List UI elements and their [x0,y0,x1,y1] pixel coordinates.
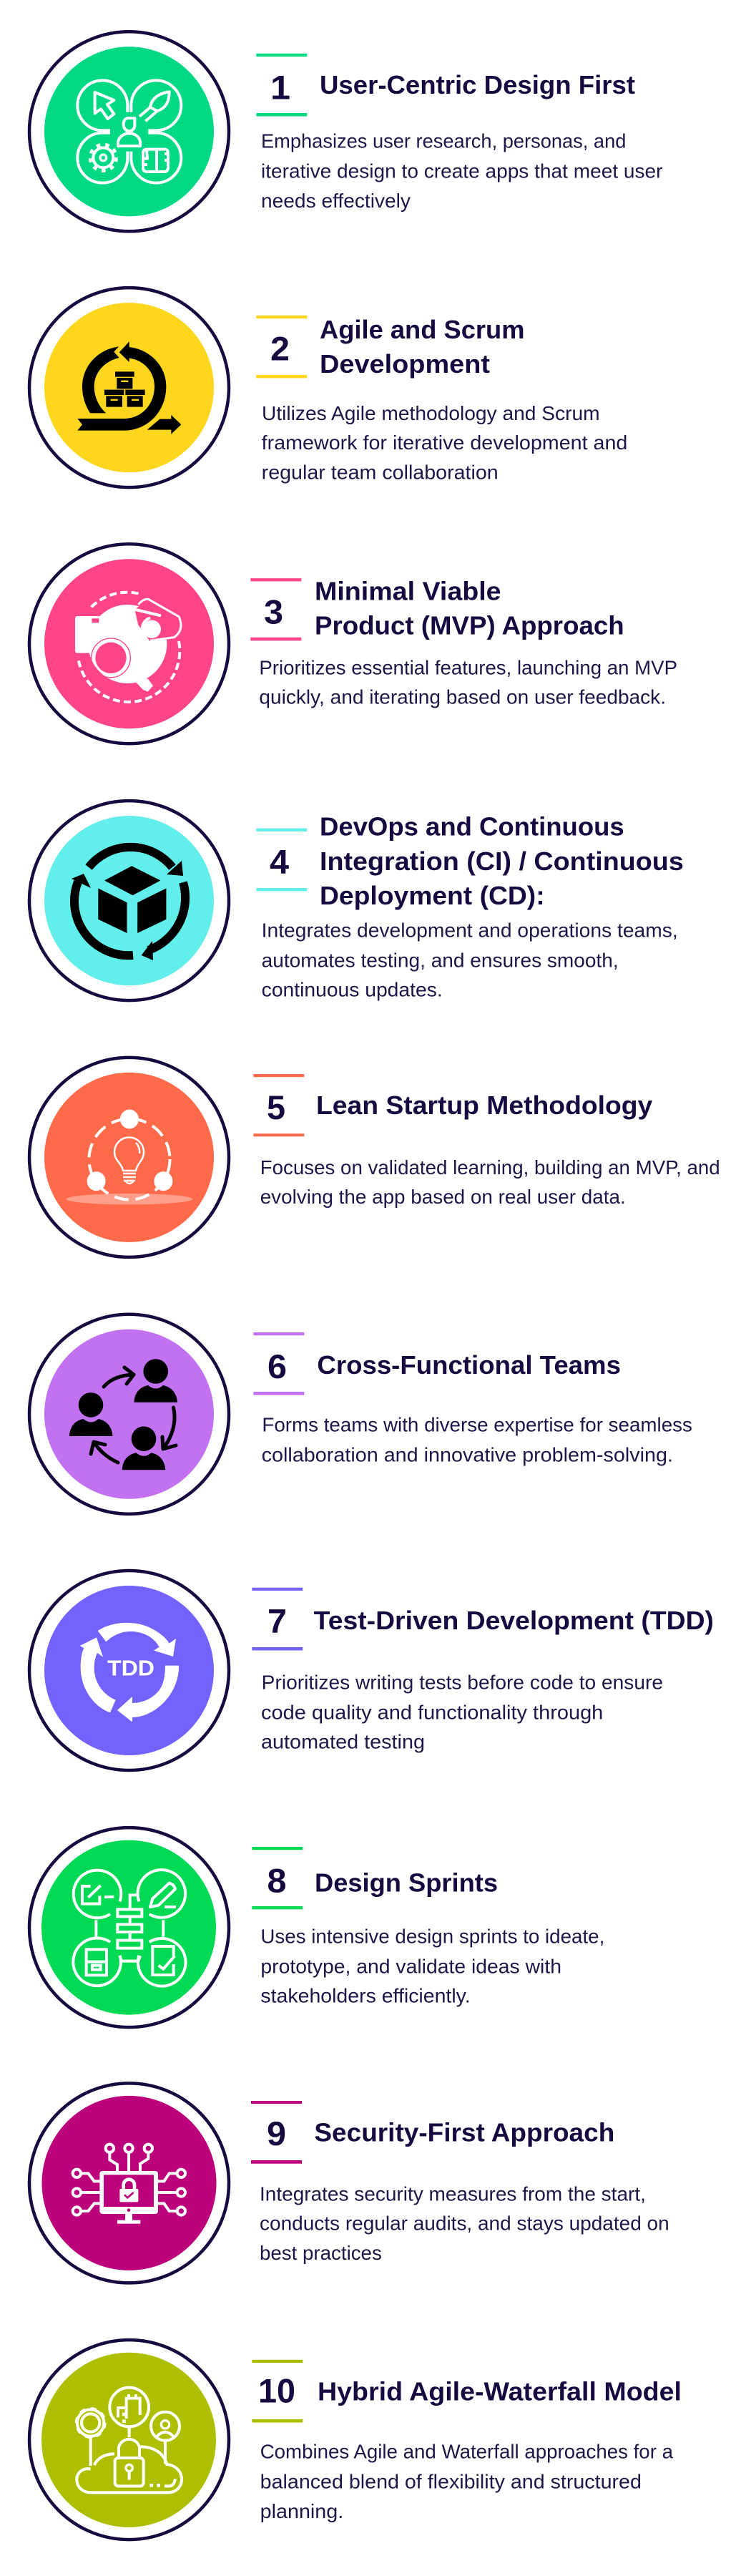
accent rules and number: 5 [267,1088,285,1126]
description: Prioritizes essential features, launching an MVP [259,657,677,679]
description: Uses intensive design sprints to ideate, [260,1926,604,1948]
description [260,2441,673,2522]
description: automated testing [261,1731,425,1753]
description: Combines Agile and Waterfall approaches for a [260,2441,673,2463]
description: Prioritizes writing tests before code to ensure [262,1672,663,1694]
icon: user-centric design badge [29,31,229,231]
panel: item 6 cross-functional teams [29,1314,692,1514]
description: stakeholders efficiently. [260,1985,471,2007]
icon: hybrid model badge [29,2340,229,2540]
description: needs effectively [261,190,411,212]
description: code quality and functionality through [261,1701,603,1723]
description: Integrates development and operations teams, [262,919,678,942]
accent rules and number: 2 [270,330,290,368]
accent rules and number [252,2360,303,2423]
description: best practices [260,2242,382,2264]
heading: Cross-Functional Teams [317,1350,621,1380]
heading: Deployment (CD): [320,881,545,910]
panel: item 1 user-centric design [29,31,662,231]
description: balanced blend of flexibility and structured [260,2470,642,2492]
description [259,657,677,708]
description: iterative design to create apps that meet user [261,160,662,182]
accent rules and number: 7 [267,1602,287,1640]
panel: item 7 test-driven development [29,1571,714,1770]
description: Focuses on validated learning, building an MVP, and [260,1156,720,1179]
panel: item 2 agile and scrum [29,288,627,487]
panel: item 8 design sprints [29,1828,604,2027]
description [262,402,627,483]
description: framework for iterative development and [262,431,627,454]
heading: Design Sprints [315,1868,498,1898]
panel: item 5 lean startup [29,1058,720,1257]
description: evolving the app based on real user data. [260,1186,626,1208]
heading: Agile and Scrum [320,315,525,344]
icon: TDD badge [29,1571,229,1770]
icon: agile and scrum badge [29,288,229,487]
description [260,2183,669,2264]
panel: item 10 hybrid agile-waterfall [29,2340,682,2540]
accent rules and number [253,1074,304,1136]
accent rules and number [250,578,301,640]
heading: DevOps and Continuous [320,812,624,841]
description [262,919,678,1001]
panel: item 4 devops and CI/CD [29,801,684,1001]
heading: User-Centric Design First [320,70,635,99]
accent rules and number: 3 [264,592,283,631]
description [260,1156,720,1208]
heading [320,812,684,910]
description: Utilizes Agile methodology and Scrum [262,402,600,424]
heading [320,315,525,379]
heading [315,577,624,640]
heading: Security-First Approach [314,2118,614,2147]
description: collaboration and innovative problem-solving. [262,1443,673,1465]
description: Forms teams with diverse expertise for seamless [262,1414,692,1436]
accent rules and number: 6 [267,1347,287,1385]
panel: item 9 security-first [29,2083,669,2283]
description: regular team collaboration [262,461,499,483]
accent rules and number [252,1588,303,1650]
accent rules and number: 8 [267,1861,286,1899]
accent rules and number [252,1847,303,1909]
heading: Development [320,349,490,379]
description: automates testing, and ensures smooth, [262,949,619,971]
accent rules and number [256,54,307,116]
heading: Lean Startup Methodology [316,1091,652,1120]
description [261,130,662,212]
heading: Minimal Viable [315,577,501,605]
description: continuous updates. [262,979,443,1001]
icon: TDD badge: TDD [107,1656,154,1680]
heading: Integration (CI) / Continuous [320,847,684,876]
accent rules and number: 10 [258,2371,295,2410]
accent rules and number [251,2101,302,2164]
accent rules and number [253,1332,304,1395]
icon: teams badge [29,1314,229,1514]
description: planning. [260,2500,343,2522]
description [262,1414,692,1465]
accent rules and number: 9 [267,2114,286,2152]
icon: DevOps cube badge [29,801,229,1000]
description [261,1672,663,1753]
description: quickly, and iterating based on user feedback. [259,686,666,708]
description: conducts regular audits, and stays updated on [260,2212,669,2234]
accent rules and number [256,829,307,891]
icon: lean startup badge [29,1058,229,1257]
accent rules and number [256,316,307,378]
icon: MVP badge [29,544,229,743]
heading: Test-Driven Development (TDD) [314,1606,714,1635]
description [260,1926,604,2007]
heading: Product (MVP) Approach [315,611,624,640]
icon: security badge [29,2083,229,2283]
accent rules and number: 4 [270,843,289,880]
icon: design sprints badge [29,1828,229,2027]
description: Integrates security measures from the start, [260,2183,646,2205]
panel: item 3 minimal viable product [29,544,677,743]
description: Emphasizes user research, personas, and [261,130,626,152]
accent rules and number: 1 [270,69,290,107]
description: prototype, and validate ideas with [260,1955,561,1977]
heading: Hybrid Agile-Waterfall Model [318,2376,682,2406]
